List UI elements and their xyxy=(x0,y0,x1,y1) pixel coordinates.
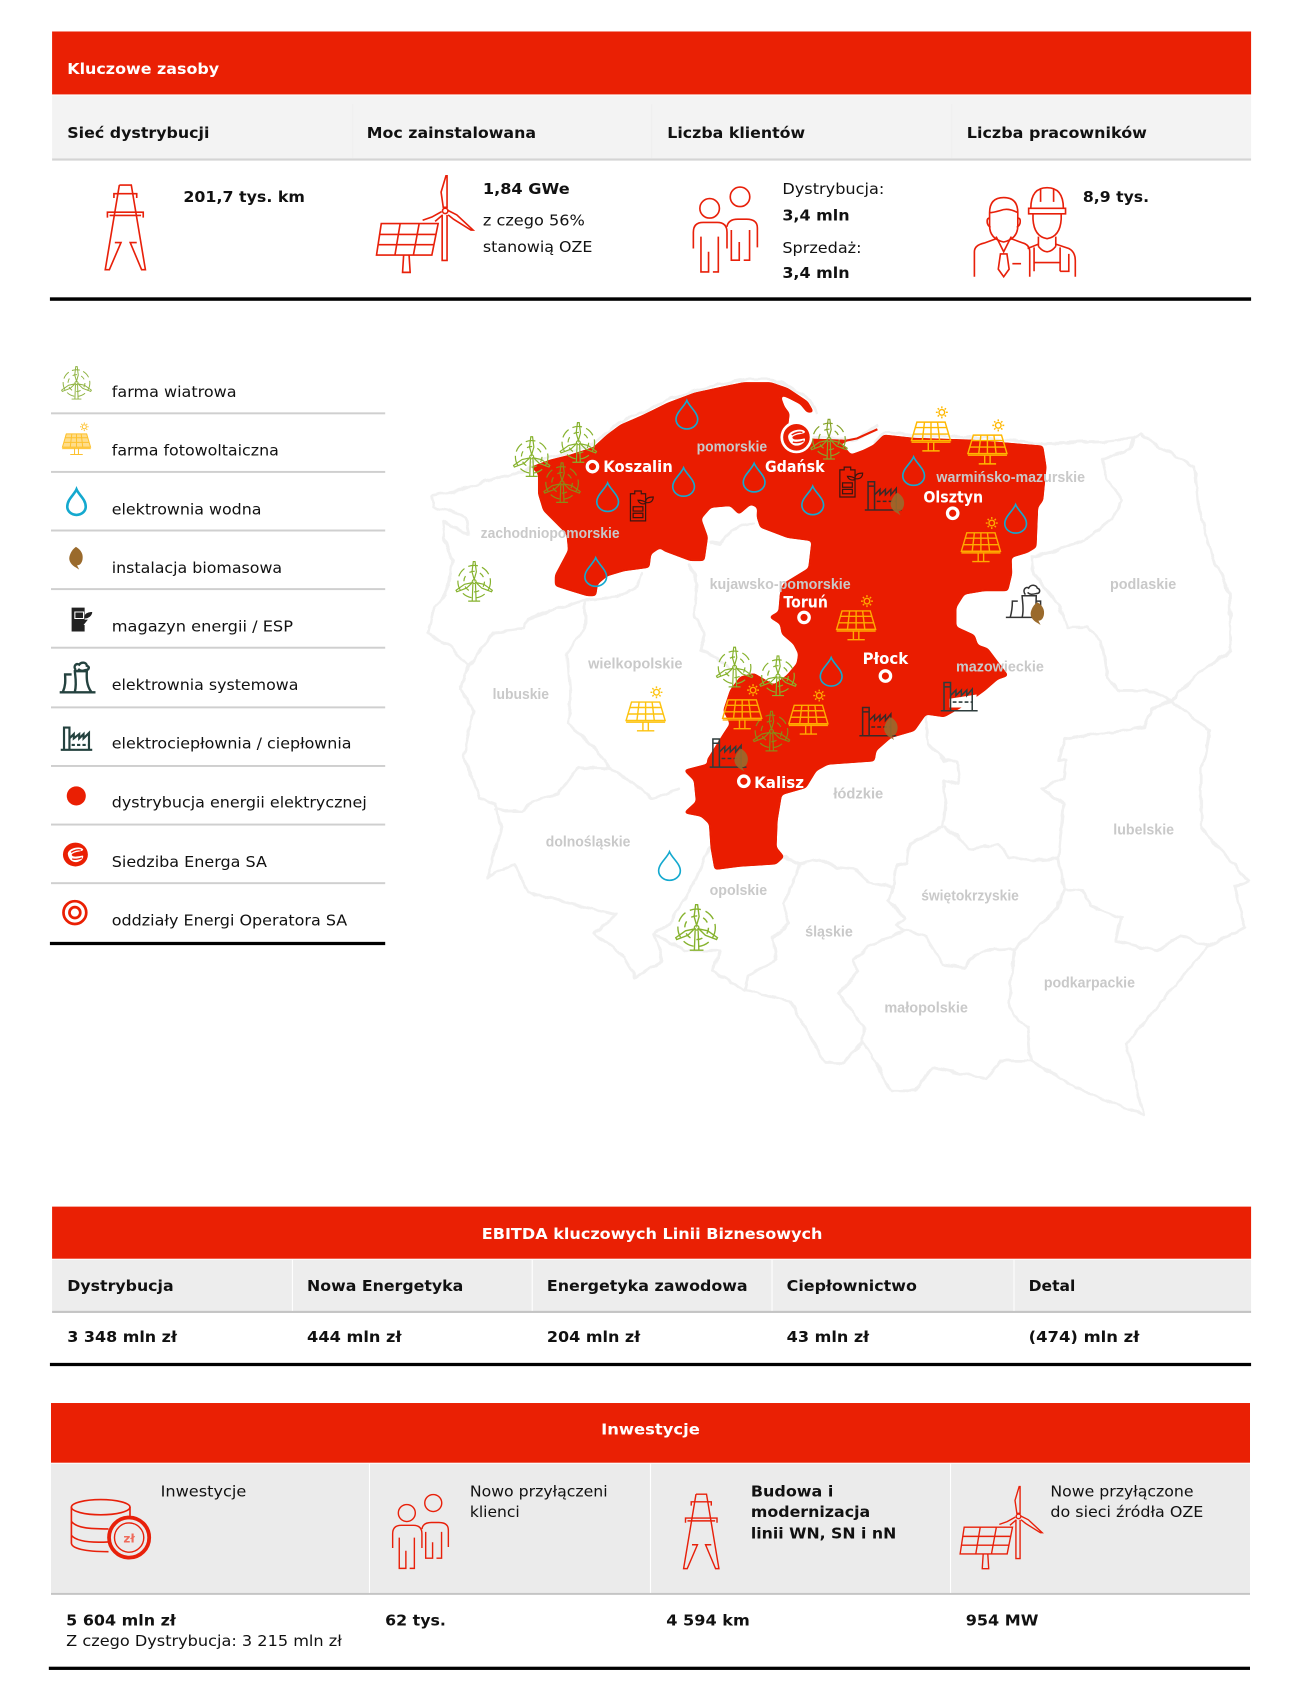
region labels: kujawsko-pomorskie xyxy=(710,577,851,593)
panel: Inwestycje xyxy=(49,1403,1250,1670)
Energa headquarters logo xyxy=(782,423,811,452)
city: Olsztyn xyxy=(923,487,983,518)
legend item: Siedziba Energa SA xyxy=(63,843,268,871)
region: dystrybucja (red area) xyxy=(532,383,1046,869)
header bar: kluczowe zasoby: Kluczowe zasoby xyxy=(67,60,219,78)
value: customers xyxy=(782,180,884,282)
legend item: instalacja biomasowa xyxy=(69,547,282,577)
legend item: dystrybucja energii: dystrybucja energii elektrycznej xyxy=(112,793,367,811)
value: customers: Dystrybucja: xyxy=(782,180,884,198)
region labels: lubelskie xyxy=(1113,822,1174,838)
column header row: Liczba pracowników xyxy=(967,124,1147,142)
text: Nowo przyłączeni klienci: Nowo przyłączeni xyxy=(470,1482,608,1500)
value: installed capacity xyxy=(483,180,592,256)
legend item: magazyn energii xyxy=(72,608,293,636)
icon: new customers xyxy=(393,1495,448,1568)
city: Toruń: Toruń xyxy=(783,593,828,612)
region labels: śląskie xyxy=(805,924,853,940)
region labels: łódzkie xyxy=(833,787,883,803)
value: customers: 3,4 mln xyxy=(782,264,850,282)
column header row: Liczba klientów xyxy=(667,124,805,142)
header bar: EBITDA xyxy=(52,1207,1251,1259)
icon: coins xyxy=(71,1500,149,1558)
header bar: kluczowe zasoby xyxy=(52,31,1251,94)
legend item: instalacja biomasowa: instalacja biomasowa xyxy=(112,559,282,577)
legend item: farma fotowoltaiczna xyxy=(62,423,279,460)
icon: wind turbine and solar panel xyxy=(377,176,473,272)
column header row: Moc zainstalowana xyxy=(367,124,536,142)
region labels: mazowieckie xyxy=(956,660,1044,676)
region labels: zachodniopomorskie xyxy=(481,526,620,542)
icon: customers xyxy=(693,187,757,272)
city: Kalisz: Kalisz xyxy=(754,773,804,792)
legend item: farma wiatrowa xyxy=(61,367,237,401)
legend item: elektrownia systemowa: elektrownia systemowa xyxy=(112,676,298,694)
text: Nowe przyłączone: do sieci źródła OZE xyxy=(1050,1503,1203,1521)
panel: kluczowe zasoby xyxy=(50,31,1251,301)
EBITDA column headers xyxy=(52,1260,1251,1313)
icon: employees xyxy=(974,188,1075,277)
EBITDA column headers: Detal xyxy=(1029,1277,1075,1295)
value: employees: 8,9 tys. xyxy=(1083,188,1149,206)
value: customers: 3,4 mln xyxy=(782,206,850,224)
text: Budowa i modernizacja xyxy=(751,1482,896,1543)
legend item: elektrociepłownia xyxy=(61,728,352,753)
legend item: elektrociepłownia: elektrociepłownia / ciepłownia xyxy=(112,735,352,753)
icon: power pylon xyxy=(105,185,145,270)
icon: wind turbine and solar panel xyxy=(960,1487,1042,1569)
text: Nowe przyłączone xyxy=(1050,1482,1203,1521)
icon: power pylon xyxy=(684,1494,719,1569)
legend item: farma wiatrowa: farma wiatrowa xyxy=(112,383,237,401)
investment values: Z czego Dystrybucja: 3 215 mln zł xyxy=(66,1632,343,1650)
grey icon row xyxy=(51,1464,1250,1595)
value: installed capacity: 1,84 GWe xyxy=(483,180,570,198)
legend item: oddziały Energi Operatora: oddziały Energi Operatora SA xyxy=(112,912,348,930)
value: installed capacity: z czego 56% xyxy=(483,212,585,230)
legend item: elektrownia systemowa xyxy=(60,663,298,694)
text: Budowa i modernizacja: Budowa i xyxy=(751,1482,833,1500)
legend item: magazyn energii: magazyn energii / ESP xyxy=(112,618,293,636)
legend item: elektrownia wodna xyxy=(67,489,262,518)
EBITDA column headers: Dystrybucja xyxy=(67,1277,174,1295)
region labels: opolskie xyxy=(710,883,767,899)
EBITDA values: 444 mln zł xyxy=(307,1328,402,1346)
region labels: lubuskie xyxy=(493,687,549,703)
legend item: dystrybucja energii xyxy=(67,786,367,811)
icons: solar farms xyxy=(626,406,1007,734)
column header row xyxy=(52,96,1251,161)
legend item: Siedziba Energa SA: Siedziba Energa SA xyxy=(112,853,268,871)
text: Budowa i modernizacja: linii WN, SN i nN xyxy=(751,1525,896,1543)
icon: system power plant xyxy=(1006,585,1044,625)
region labels: warmińsko-mazurskie xyxy=(935,470,1085,486)
text: Budowa i modernizacja: modernizacja xyxy=(751,1503,870,1521)
EBITDA column headers: Energetyka zawodowa xyxy=(547,1277,748,1295)
region labels: dolnośląskie xyxy=(546,834,630,850)
text: Nowo przyłączeni klienci xyxy=(470,1482,608,1521)
panel: EBITDA xyxy=(50,1207,1251,1366)
investment values: 4 594 km xyxy=(666,1611,750,1629)
region labels: wielkopolskie xyxy=(587,656,683,672)
EBITDA values: 43 mln zł xyxy=(787,1328,870,1346)
city: Płock: Płock xyxy=(863,649,909,668)
EBITDA column headers: Nowa Energetyka xyxy=(307,1277,463,1295)
text: Nowe przyłączone: Nowe przyłączone xyxy=(1050,1482,1194,1500)
EBITDA values: 3 348 mln zł xyxy=(67,1328,177,1346)
column header row: Sieć dystrybucji xyxy=(67,124,209,142)
header bar: EBITDA: EBITDA kluczowych Linii Biznesowych xyxy=(482,1225,822,1243)
map of Poland xyxy=(427,380,1248,1114)
city: Płock xyxy=(863,649,909,681)
EBITDA values: 204 mln zł xyxy=(547,1328,641,1346)
investment values: 954 MW xyxy=(966,1611,1039,1629)
legend item: elektrownia wodna: elektrownia wodna xyxy=(112,500,262,518)
region labels: pomorskie xyxy=(697,439,767,455)
legend item: farma fotowoltaiczna: farma fotowoltaiczna xyxy=(112,442,279,460)
city: Koszalin: Koszalin xyxy=(603,457,673,476)
investment values: 5 604 mln zł xyxy=(66,1611,176,1629)
header bar: Inwestycje xyxy=(51,1403,1250,1463)
icons: energy storage xyxy=(630,467,863,521)
city: Olsztyn: Olsztyn xyxy=(923,487,983,506)
text: Nowo przyłączeni klienci: klienci xyxy=(470,1503,520,1521)
value: customers: Sprzedaż: xyxy=(782,239,862,257)
region labels: podlaskie xyxy=(1110,577,1176,593)
icon: coins: zł xyxy=(123,1531,135,1545)
voivodeship outlines xyxy=(427,380,1248,1114)
EBITDA values xyxy=(67,1328,1140,1346)
text: Inwestycje: Inwestycje xyxy=(161,1482,246,1500)
value: installed capacity: stanowią OZE xyxy=(483,238,592,256)
city: Toruń xyxy=(783,593,828,623)
legend item: oddziały Energi Operatora xyxy=(63,901,348,930)
value: distribution network: 201,7 tys. km xyxy=(183,188,305,206)
EBITDA column headers: Ciepłownictwo xyxy=(787,1277,917,1295)
icons: wind farms xyxy=(455,419,848,950)
city: Gdańsk: Gdańsk xyxy=(765,457,826,476)
region labels: podkarpackie xyxy=(1044,975,1135,991)
investment values: 62 tys. xyxy=(385,1611,446,1629)
header bar: Inwestycje: Inwestycje xyxy=(601,1420,700,1438)
investment values xyxy=(66,1611,1039,1650)
region labels: świętokrzyskie xyxy=(921,889,1019,905)
EBITDA values: (474) mln zł xyxy=(1029,1328,1140,1346)
icons: hydro plants xyxy=(585,400,1026,880)
region labels: małopolskie xyxy=(884,1000,968,1016)
icons: heat and power plants xyxy=(710,482,978,772)
legend xyxy=(50,367,385,945)
region labels xyxy=(481,439,1176,1016)
